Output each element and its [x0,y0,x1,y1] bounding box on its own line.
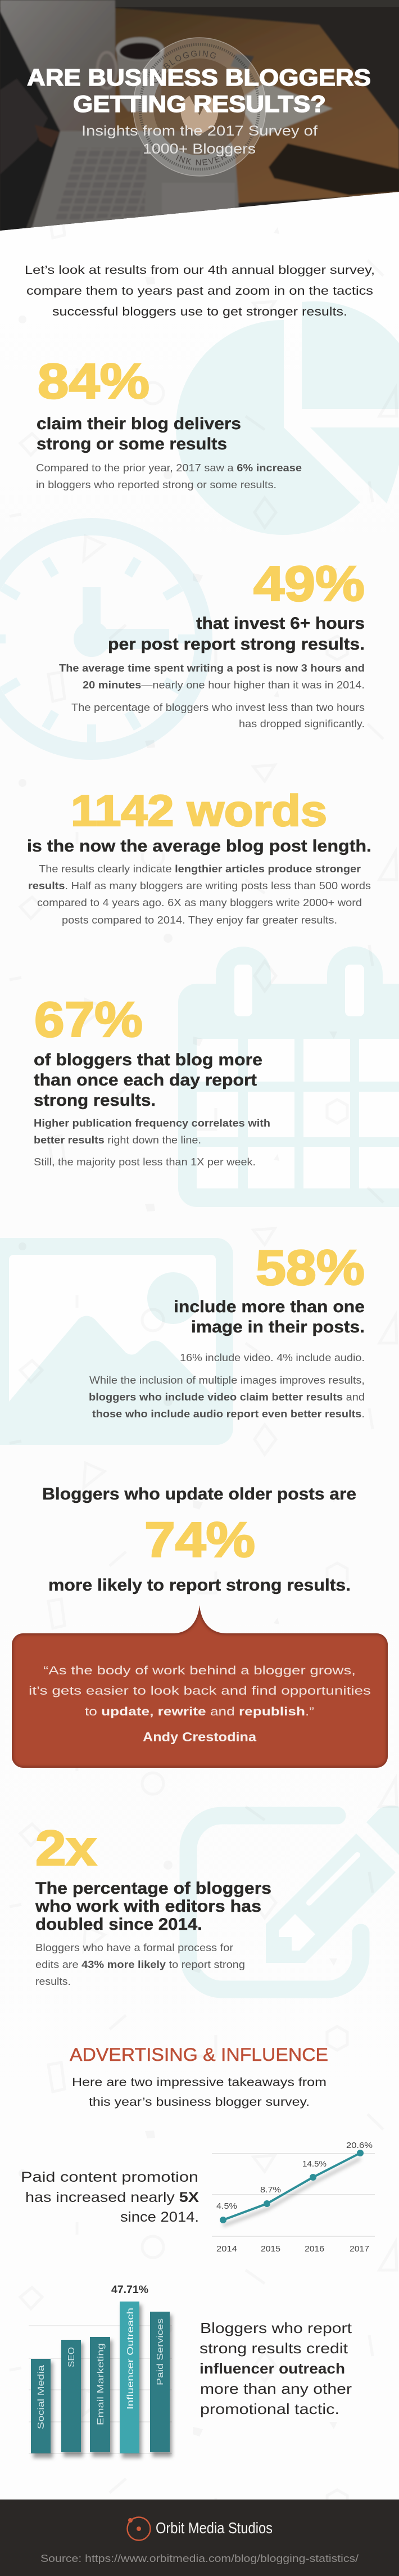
heading: claim their blog delivers [37,415,241,453]
icon: pie chart [176,301,399,535]
heading: of bloggers that blog more [34,1051,262,1110]
panel: 49% time invested [59,556,365,729]
text: influencer outreach takeaway: promotional tactic. [200,2401,339,2417]
stat: 74%: 74% [144,1512,255,1568]
intro text: successful bloggers use to get stronger results. [52,305,347,318]
line chart: 2014 [216,2244,237,2254]
heading: claim their blog delivers: claim their blog delivers [37,415,241,433]
heading: that invest 6+ hours [108,614,365,654]
hero photo background [0,0,399,231]
body text: Bloggers who have a formal process for [35,1942,233,1953]
subtitle: 1000+ Bloggers [143,141,256,157]
panel: 2x editors [35,1820,271,1987]
body text [36,462,302,490]
line chart: 2016 [305,2244,324,2254]
heading: include more than one image: include more than one [174,1298,365,1316]
footer [0,2500,399,2576]
bar chart [29,2284,172,2458]
bar chart: 47.71% [111,2284,148,2296]
icon: orbit media logo [127,2518,151,2540]
stat: 49%: 49% [253,556,365,611]
intro text [25,264,375,318]
heading: of bloggers that blog more: of bloggers that blog more [34,1051,262,1069]
heading: that invest 6+ hours: per post report strong results. [108,635,365,654]
line chart: 2017 [350,2244,369,2254]
body text: edits are 43% more likely to report strong [35,1959,245,1970]
quote text [29,1664,371,1718]
icon: pencil [188,1806,399,1989]
body text: Compared to the prior year, 2017 saw a 6% increase [36,462,302,474]
heading: average blog post length: is the now the average blog post length. [27,837,371,855]
intro text: Let’s look at results from our 4th annual blogger survey, [25,264,375,277]
panel: 84% blog results [36,353,302,490]
body text: results . Half as many bloggers are writing posts less than 500 words [28,880,371,891]
callout: quote bubble [12,1605,388,1768]
body text: The average time spent writing a post is now 3 hours and [59,663,365,674]
body text: 16% include video. 4% include audio. [180,1352,365,1363]
heading: of bloggers that blog more: strong results. [34,1091,156,1110]
line chart: 14.5% [302,2159,327,2169]
line chart: 20.6% [346,2141,373,2150]
body text: better results right down the line. [34,1134,201,1146]
stamp badge: INK NEVER [176,153,227,165]
icon: clock [0,526,203,751]
stat: 1142 words: 1142 words [71,786,327,835]
body text: bloggers who include video claim better results and [89,1391,365,1403]
intro text: compare them to years past and zoom in on the tactics [26,285,373,298]
text: influencer outreach takeaway: strong results credit [200,2340,348,2357]
body text: The results clearly indicate lengthier articles produce stronger [39,863,361,875]
heading: percentage of bloggers with editors: The percentage of bloggers [35,1879,271,1898]
body text [28,863,371,926]
text: influencer outreach takeaway: influencer outreach [200,2360,345,2377]
heading: percentage of bloggers with editors: who work with editors has [35,1897,261,1916]
body text [35,1942,245,1987]
line chart: 2015 [261,2244,280,2254]
text: paid content promotion [21,2169,199,2225]
title [27,64,371,117]
panel: 1142 words [27,786,371,926]
panel: 67% frequency [34,992,270,1168]
icon: calendar [178,946,399,1207]
quote text: “As the body of work behind a blogger grows, [43,1664,356,1677]
quote text: to update, rewrite and republish .” [85,1705,314,1718]
title: ARE BUSINESS BLOGGERS [27,64,371,91]
body text: those who include audio report even better results . [92,1408,365,1420]
body text: results. [35,1976,71,1987]
heading: include more than one image: image in their posts. [191,1318,365,1336]
logo wordmark: Orbit Media Studios [156,2519,273,2537]
body text: 20 minutes —nearly one hour higher than it was in 2014. [83,679,365,691]
line chart: 4.5% [216,2201,237,2211]
heading: percentage of bloggers with editors: doubled since 2014. [35,1915,202,1934]
heading: bloggers who update older posts: Bloggers who update older posts are [42,1485,356,1503]
stamp badge [133,37,266,177]
heading: more likely to report: more likely to report strong results. [48,1576,351,1595]
subtitle: Insights from the 2017 Survey of [81,123,318,139]
stat: 84%: 84% [38,353,149,409]
bar chart: Influencer Outreach [126,2308,135,2410]
bar chart: SEO [67,2347,76,2367]
stamp badge: OF BLOGGING [154,51,216,83]
stat: 58%: 58% [256,1240,365,1295]
line chart [212,2141,375,2254]
panel: 74% updating posts [42,1485,356,1595]
body text: The percentage of bloggers who invest less than two hours [71,702,365,713]
text: paid content promotion: Paid content promotion [21,2169,198,2185]
heading: percentage of bloggers with editors [35,1879,271,1934]
body text: in bloggers who reported strong or some results. [36,479,276,490]
panel: 58% images [89,1240,365,1420]
heading: that invest 6+ hours: that invest 6+ hours [196,614,365,633]
body text: posts compared to 2014. They enjoy far greater results. [62,915,337,926]
body text [34,1118,270,1168]
stat: 2x: 2x [35,1820,97,1876]
text: influencer outreach takeaway: more than any other [200,2380,352,2397]
text: two takeaways: Here are two impressive takeaways from [72,2076,327,2089]
text: influencer outreach takeaway: Bloggers who report [200,2320,352,2336]
text: two takeaways [72,2076,327,2109]
text: paid content promotion: has increased nearly 5X [25,2190,199,2205]
body text: While the inclusion of multiple images improves results, [89,1375,365,1386]
body text: Higher publication frequency correlates with [34,1118,270,1129]
text: paid content promotion: since 2014. [120,2209,199,2225]
stat: 67%: 67% [34,992,143,1047]
title: GETTING RESULTS? [73,91,326,117]
body text: compared to 4 years ago. 6X as many bloggers write 2000+ word [37,897,362,908]
bar chart: Paid Services [156,2318,165,2385]
heading: claim their blog delivers: strong or some results [37,435,227,453]
heading: include more than one image [174,1298,365,1336]
text: two takeaways: this year’s business blogger survey. [89,2096,310,2109]
heading: advertising and influence: ADVERTISING & INFLUENCE [70,2044,328,2065]
quote text: it’s gets easier to look back and find opportunities [29,1685,371,1697]
line chart: 8.7% [260,2185,281,2195]
bar chart: Social Media [37,2365,46,2429]
icon: image [0,1238,233,1445]
quote author: Andy Crestodina [143,1730,256,1744]
source line: Source: https://www.orbitmedia.com/blog/blogging-statistics/ [40,2553,359,2564]
heading: of bloggers that blog more: than once each day report [34,1071,257,1089]
body text: has dropped significantly. [239,718,365,729]
body text [89,1352,365,1420]
body text: Still, the majority post less than 1X per week. [34,1156,256,1168]
subtitle [81,123,318,157]
text: influencer outreach takeaway [200,2320,352,2417]
body text [59,663,365,729]
bar chart: Email Marketing [96,2343,106,2425]
